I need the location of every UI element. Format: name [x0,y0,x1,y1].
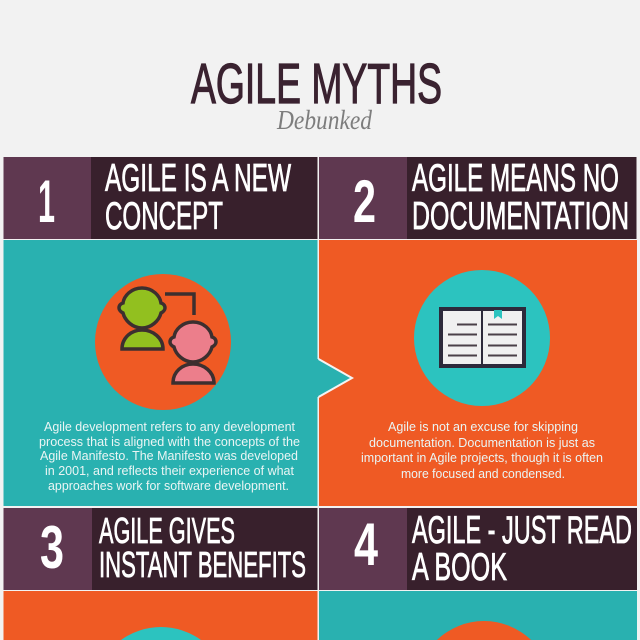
arrow notch [317,359,352,397]
number block 4 [319,508,407,590]
body background 4 [319,591,637,640]
number block 3: 3 [40,514,64,581]
body background 2 [319,240,637,506]
title: AGILE MYTHS [191,52,442,116]
body text 2: documentation. Documentation is just as [369,436,595,450]
body text 1 [39,420,300,493]
panel: myth 4 [319,508,637,640]
body text 1: approaches work for software development. [48,479,289,493]
body text 1: process that is aligned with the concepts of the [39,435,300,449]
panel: myth 3 [4,508,318,640]
body text 1: in 2001, and reflects their experience of what [45,464,295,478]
body text 2 [361,420,603,481]
heading 4: A BOOK [412,546,507,589]
panel: myth 1 [4,157,318,506]
heading 4 [407,508,637,590]
icon: two people circle [95,274,231,410]
icon circle 4 [437,621,531,640]
icon: open book circle [414,270,550,406]
number block 2: 2 [353,168,376,235]
heading 3 [92,508,318,590]
subtitle: Debunked [276,105,372,135]
heading 1 [91,157,318,239]
body background 3 [4,591,318,640]
number block 3 [4,508,92,590]
heading 3: INSTANT BENEFITS [99,544,306,585]
body text 2: important in Agile projects, though it is often [361,451,603,465]
number block 1: 1 [38,168,55,235]
body text 2: more focused and condensed. [401,467,565,481]
icon circle 3 [121,627,201,640]
body text 1: Agile Manifesto. The Manifesto was developed [40,449,298,463]
number block 1 [4,157,92,239]
number block 2 [319,157,407,239]
body text 1: Agile development refers to any development [44,420,296,434]
heading 1: AGILE IS A NEW [105,157,291,200]
number block 4: 4 [354,511,378,578]
body text 2: Agile is not an excuse for skipping [388,420,578,434]
heading 3: AGILE GIVES [99,510,235,551]
panel: myth 2 [317,157,637,506]
heading 1: CONCEPT [105,195,223,238]
body background 1 [4,240,318,506]
heading 2 [407,157,636,239]
